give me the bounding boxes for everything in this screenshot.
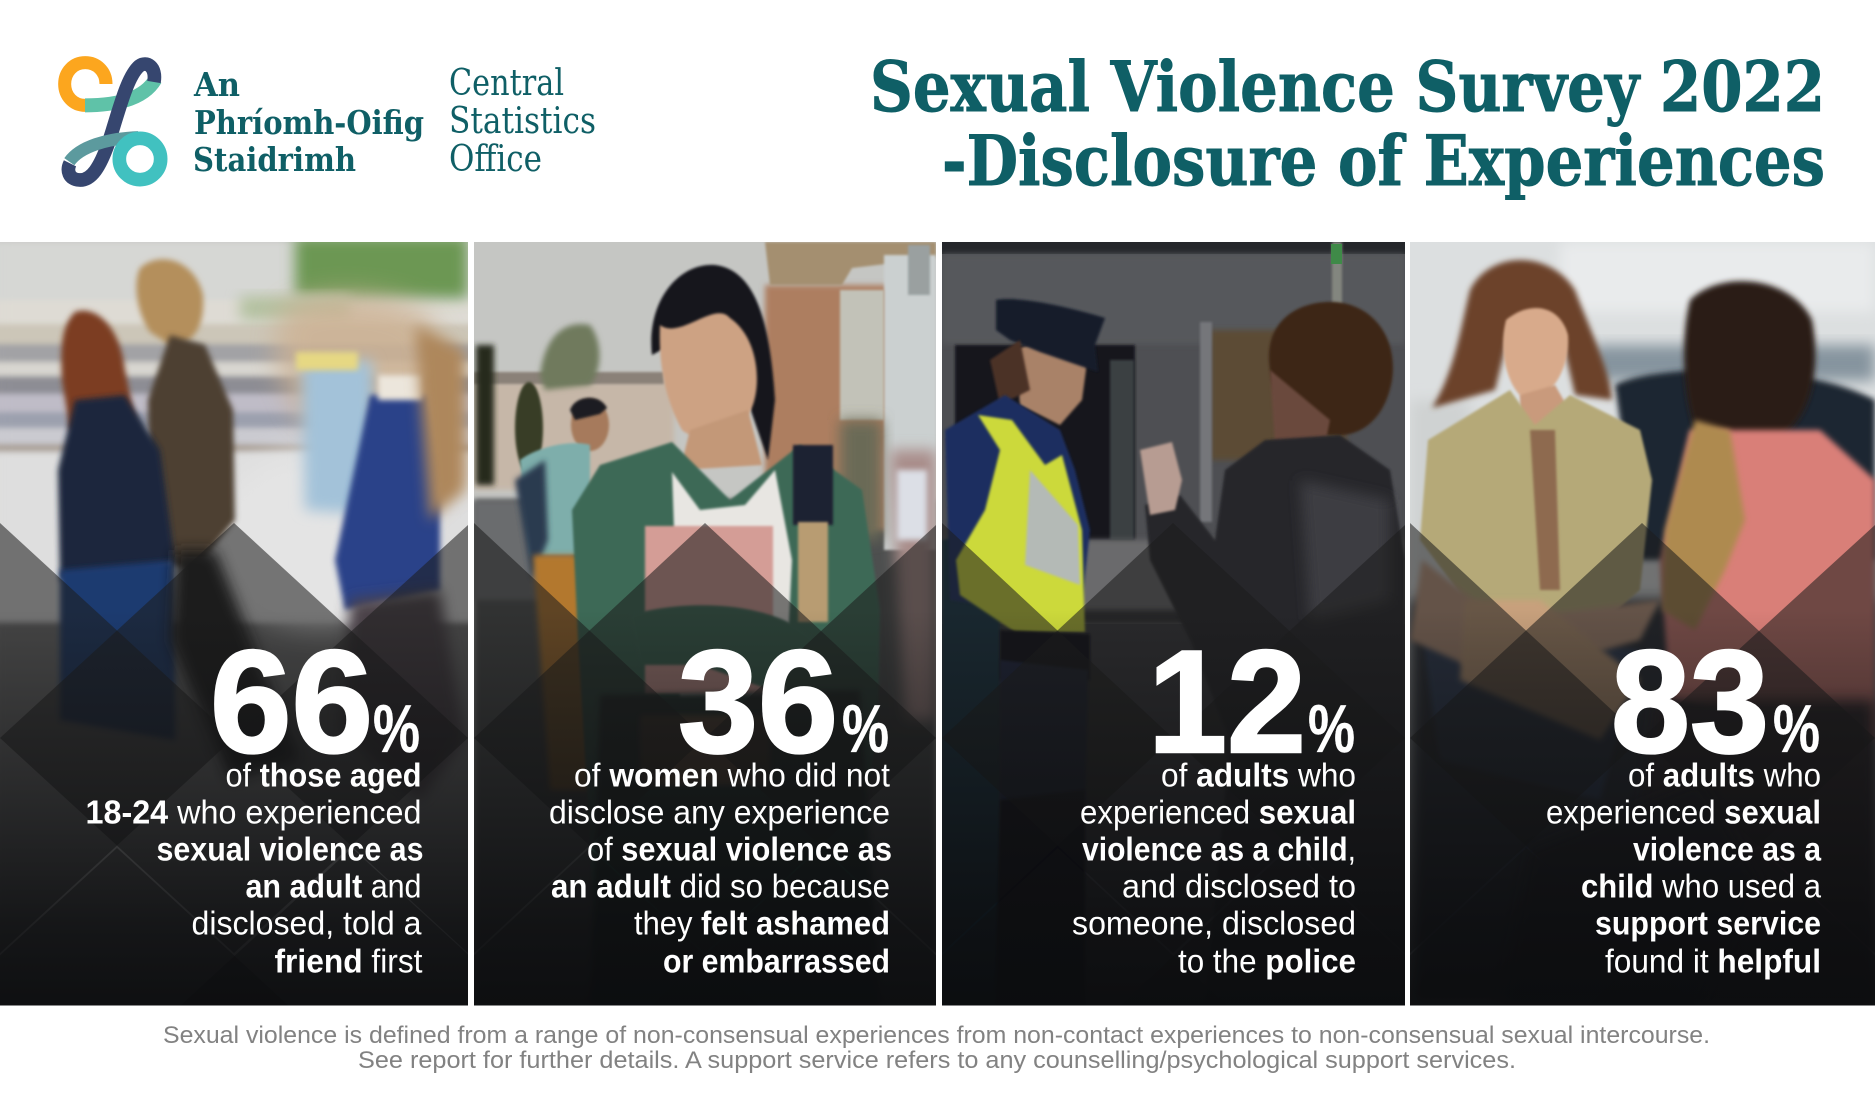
logo wordmark: English name: Office <box>449 139 542 180</box>
stat: 66%: % <box>373 691 420 767</box>
stat: 36%: % <box>842 691 889 767</box>
panel: 36% felt ashamed <box>474 242 936 1006</box>
logo wordmark: Irish name: Phríomh-Oifig <box>194 103 424 142</box>
title <box>870 47 1825 202</box>
person <box>1269 302 1393 435</box>
stat: 36%: 36 <box>678 620 838 783</box>
text block <box>86 758 424 981</box>
text block: someone, disclosed <box>1072 906 1356 943</box>
text block: they felt ashamed <box>634 906 890 943</box>
text block: to the police <box>1178 944 1356 981</box>
text block <box>549 758 892 981</box>
photo: garda officer talking to a person <box>942 242 1405 1006</box>
text block: support service <box>1595 906 1821 943</box>
overlay: diamond pattern <box>0 523 468 1006</box>
photo: woman holding books on campus <box>474 242 936 1006</box>
stat: 12%: 12 <box>1148 620 1306 783</box>
stat: 12%: % <box>1308 691 1355 767</box>
text block <box>1546 758 1821 981</box>
text block: of adults who <box>1628 758 1821 795</box>
text block: sexual violence as <box>156 832 424 869</box>
text block: an adult and <box>246 869 422 906</box>
overlay: diamond pattern <box>942 523 1405 1006</box>
logo wordmark: Irish name <box>193 65 424 179</box>
text block: an adult did so because <box>551 869 890 906</box>
text block <box>1072 758 1356 981</box>
background people <box>571 399 609 451</box>
woman right <box>1684 281 1815 445</box>
photo: support group conversation <box>1410 242 1875 1006</box>
officer <box>942 538 1000 908</box>
text block: of sexual violence as <box>587 832 892 869</box>
stat: 83%: % <box>1773 691 1820 767</box>
text block: of adults who <box>1161 758 1356 795</box>
text block: child who used a <box>1581 869 1821 906</box>
woman <box>651 265 775 460</box>
text block: experienced sexual <box>1546 795 1821 832</box>
text block: friend first <box>274 944 423 981</box>
overlay: diamond pattern <box>474 523 936 1006</box>
woman left <box>1432 260 1612 408</box>
photo: people walking in motion blur <box>0 242 468 956</box>
stat: 83%: 83 <box>1611 620 1769 783</box>
footnote <box>163 1022 1710 1074</box>
text block: experienced sexual <box>1080 795 1356 832</box>
logo wordmark: English name: Statistics <box>449 101 596 142</box>
figures <box>275 295 457 490</box>
logo wordmark: Irish name: Staidrimh <box>193 140 356 179</box>
footnote: See report for further details. A support service refers to any counselling/psychological support services. <box>358 1047 1516 1074</box>
text block: of women who did not <box>574 758 891 795</box>
logo wordmark: Irish name: An <box>193 65 240 104</box>
panel: 83% support service helpful <box>1410 242 1875 1006</box>
text block: and disclosed to <box>1122 869 1356 906</box>
text block: found it helpful <box>1605 944 1821 981</box>
panel: 12% disclosed to police <box>942 242 1405 1006</box>
overlay: diamond pattern <box>1410 523 1875 1006</box>
logo wordmark: English name: Central <box>449 63 564 104</box>
logo wordmark: English name <box>449 63 596 180</box>
footnote: Sexual violence is defined from a range of non-consensual experiences from non-contact experiences to non-consensual sexual intercourse. <box>163 1022 1710 1049</box>
text block: disclosed, told a <box>192 906 422 943</box>
text block: 18-24 who experienced <box>86 795 422 832</box>
stat: 66%: 66 <box>210 620 373 783</box>
text block: disclose any experience <box>549 795 890 832</box>
panel: 66% told a friend <box>0 242 468 1006</box>
text block: or embarrassed <box>663 944 890 981</box>
text block: of those aged <box>226 758 422 795</box>
text block: violence as a child, <box>1082 832 1356 869</box>
logo: Central Statistics Office mark <box>65 63 161 180</box>
text block: violence as a <box>1633 832 1821 869</box>
